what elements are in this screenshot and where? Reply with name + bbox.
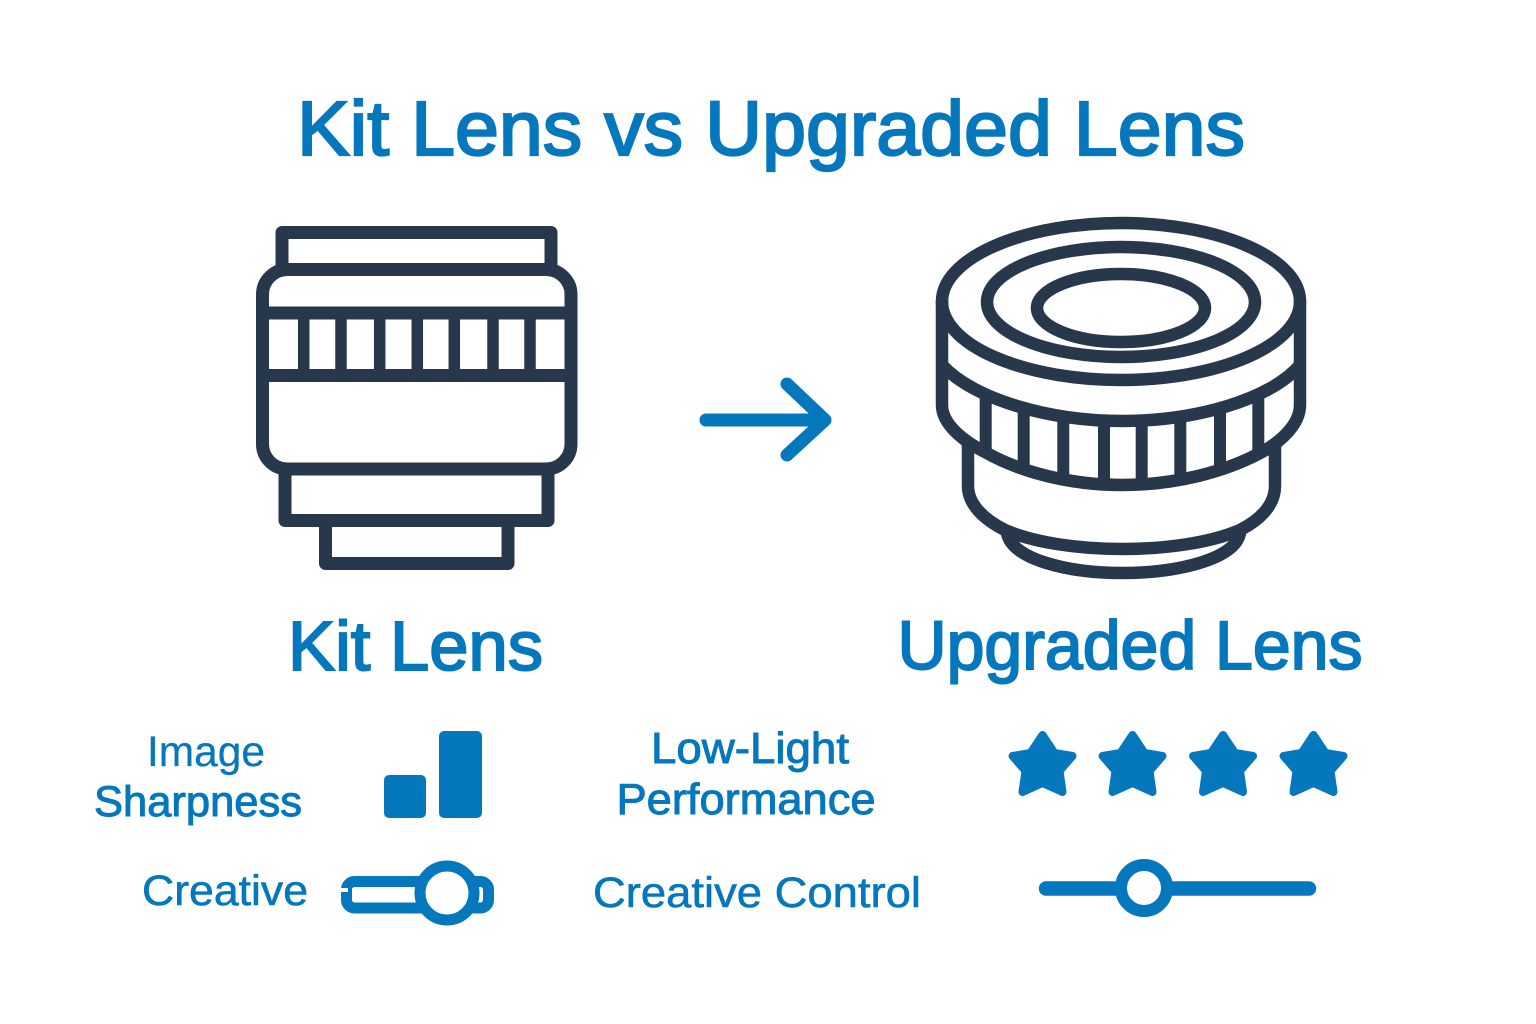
label: creative control: Creative Control: [593, 869, 921, 917]
label: image sharpness: [94, 728, 302, 826]
title: Kit Lens vs Upgraded Lens: [297, 86, 1245, 172]
label: low-light performance: Low-Light: [651, 724, 849, 773]
icon: creative slider: [339, 866, 488, 920]
icon: upgraded lens: [942, 223, 1300, 573]
label: creative: Creative: [142, 867, 308, 915]
label: image sharpness: Sharpness: [94, 778, 302, 826]
icon: kit lens: [262, 232, 571, 564]
icon: bars: [384, 731, 482, 818]
label: image sharpness: Image: [147, 728, 265, 776]
icon: creative control slider: [1046, 865, 1309, 911]
heading: kit lens: Kit Lens: [288, 607, 543, 685]
heading: upgraded lens: Upgraded Lens: [898, 607, 1362, 684]
arrow: [706, 384, 825, 455]
label: low-light performance: [616, 724, 876, 824]
label: low-light performance: Performance: [616, 775, 876, 824]
icon: four stars: [1012, 735, 1344, 792]
